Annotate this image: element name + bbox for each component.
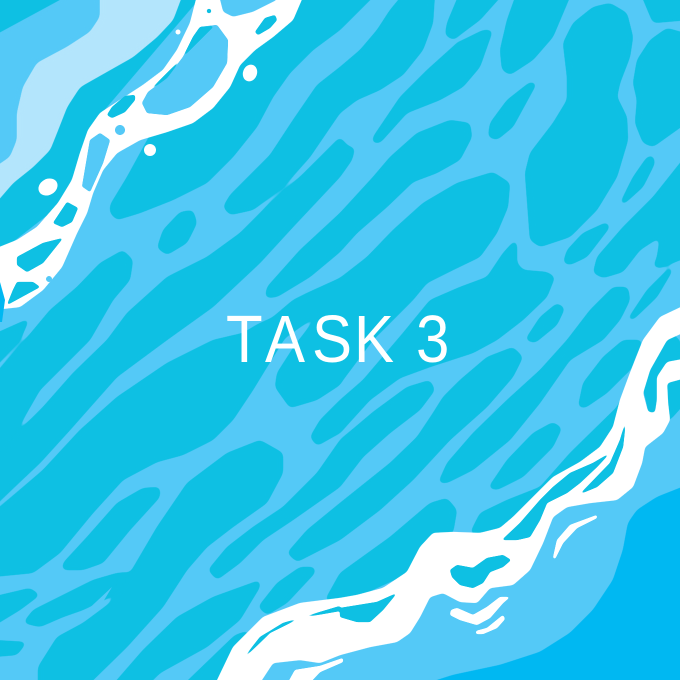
foam edge tint xyxy=(0,282,5,322)
foam ripples xyxy=(285,515,597,680)
title: TASK 3 xyxy=(226,303,449,377)
light shallow band xyxy=(0,0,102,170)
foam slits xyxy=(242,420,626,660)
bottom-right foam xyxy=(210,298,680,680)
bottom-right deep water xyxy=(400,480,680,680)
thin light sliver inside blob xyxy=(82,587,112,617)
foam holes dark xyxy=(7,9,277,305)
foam droplets xyxy=(35,30,259,199)
top-left foam xyxy=(0,0,305,322)
foam body xyxy=(0,0,305,310)
foam holes light xyxy=(46,25,228,282)
pale sand water xyxy=(0,0,185,212)
